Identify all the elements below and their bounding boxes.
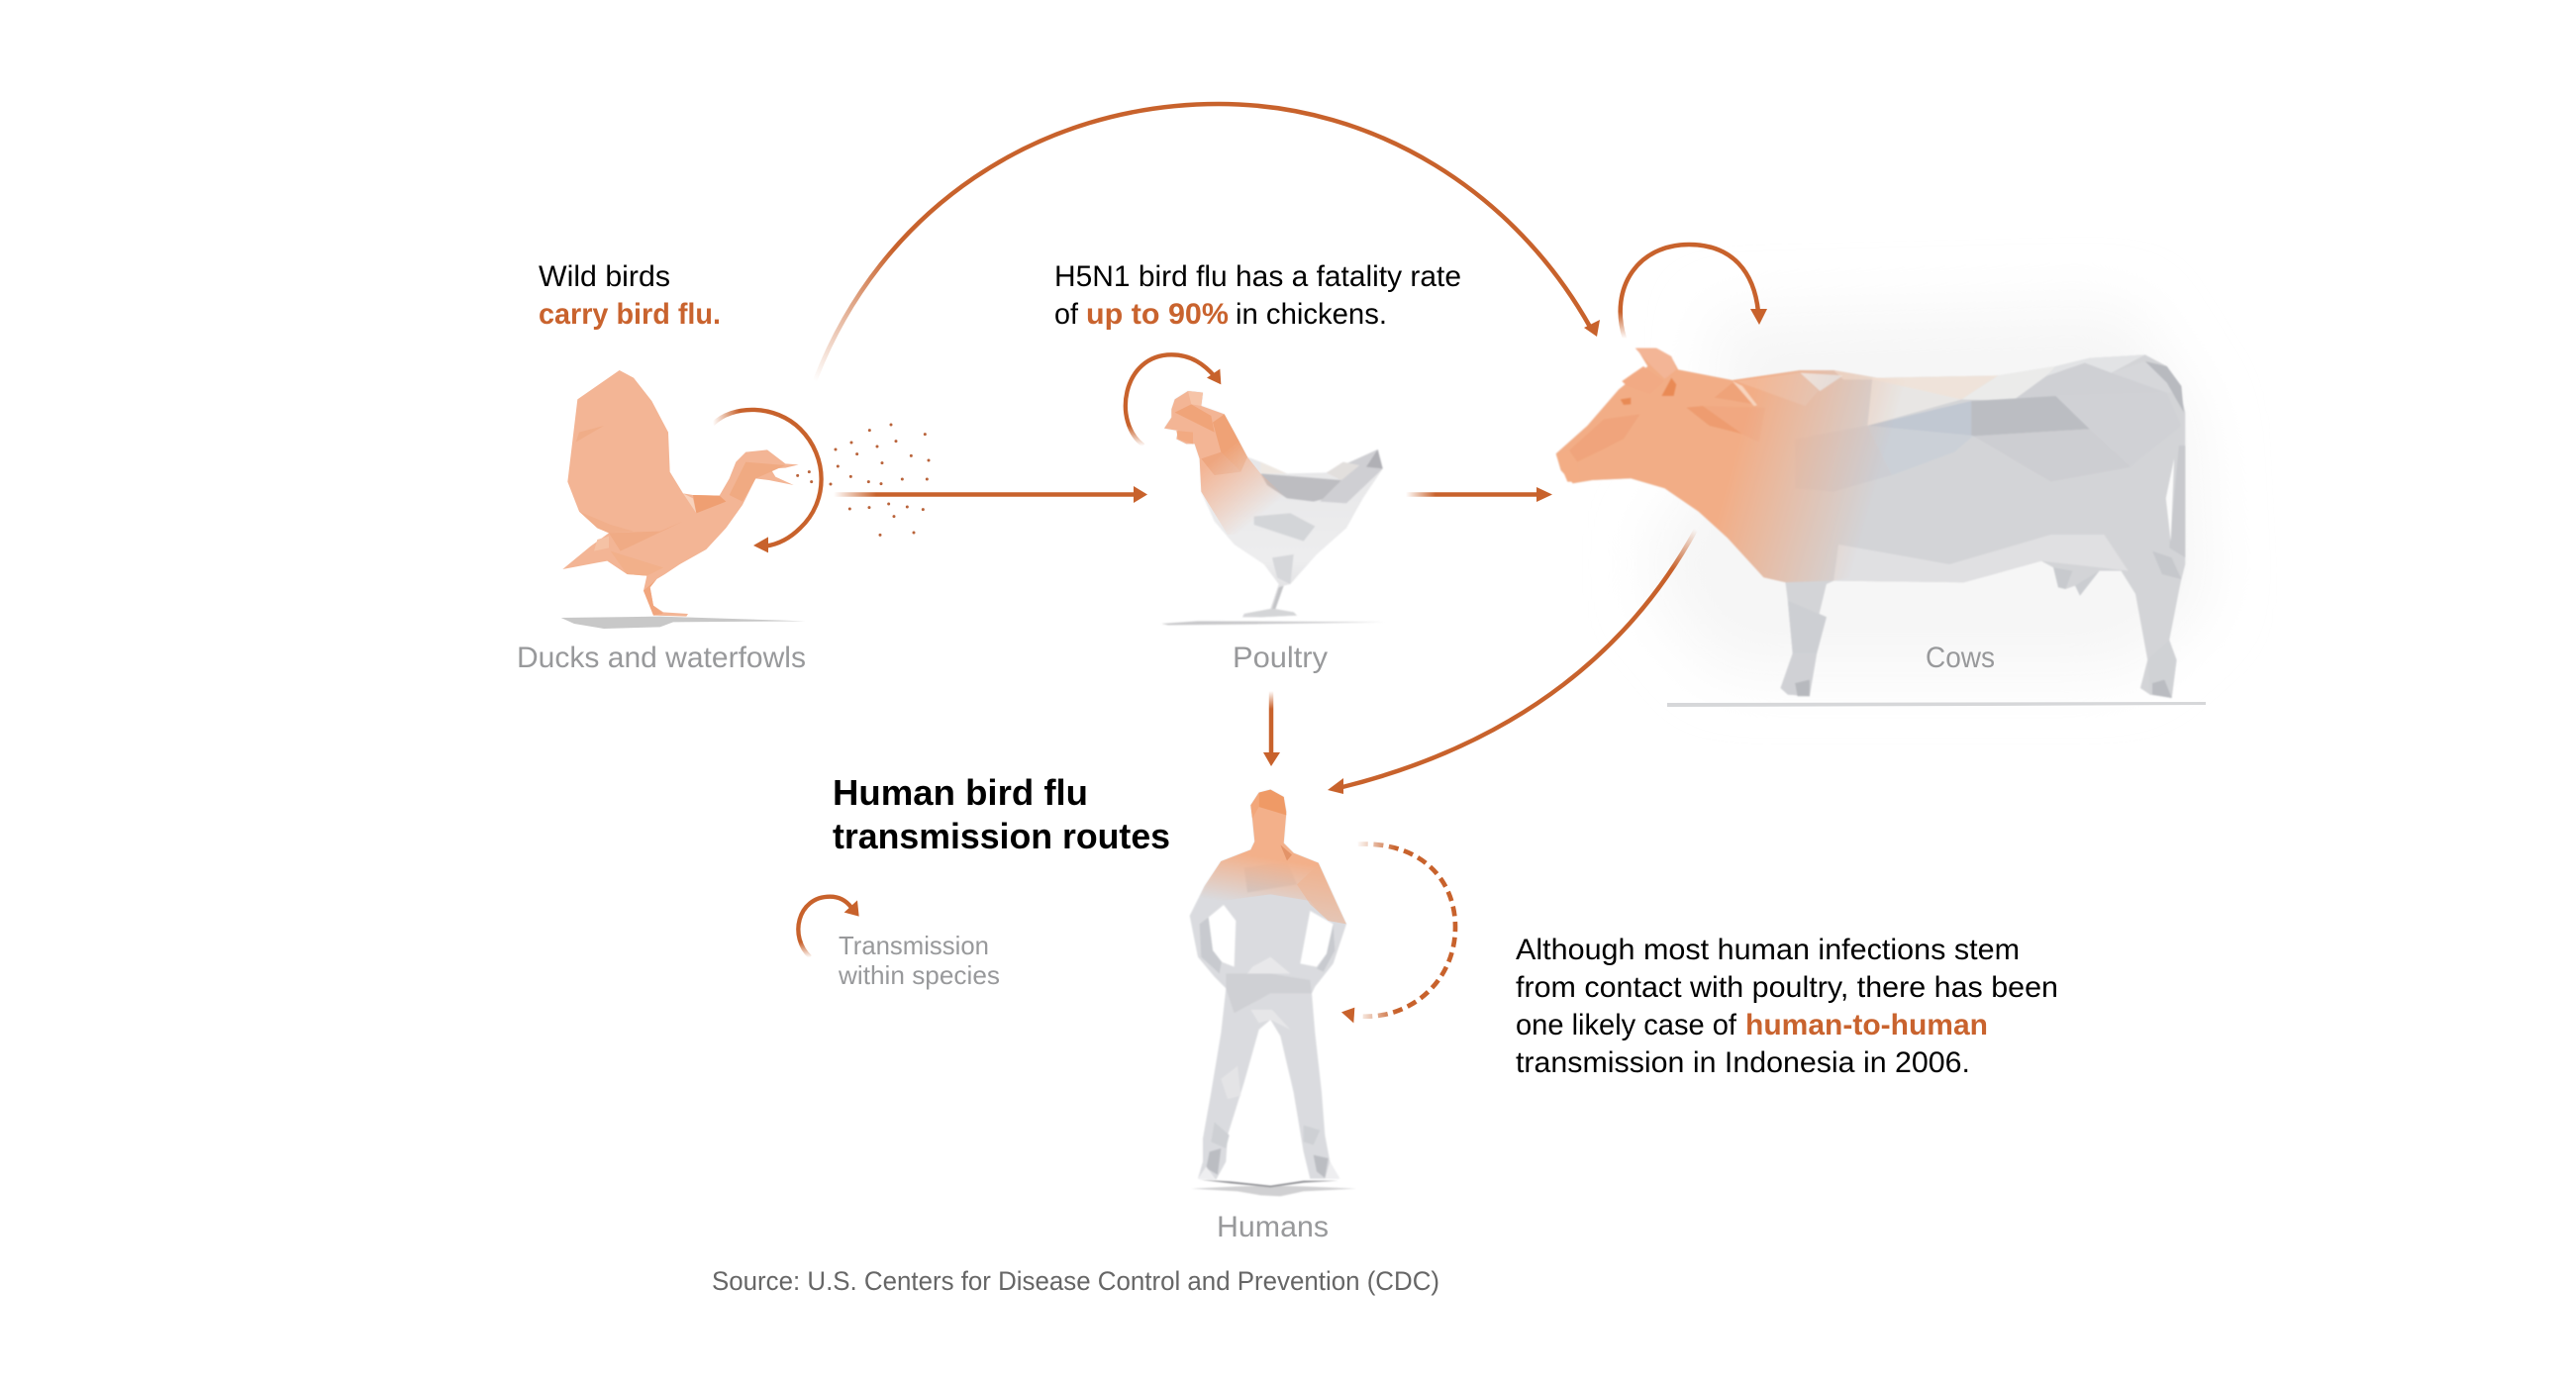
legend text: Transmission <box>839 931 989 960</box>
text: H5N1 fatality rate: up to 90% <box>1086 298 1229 331</box>
arrow: ducks to poultry <box>834 486 1147 503</box>
illustration: duck <box>561 370 805 629</box>
chicken shadow <box>1161 621 1384 625</box>
arrow: cows to humans <box>1328 530 1696 794</box>
human orange right-arm tint <box>1297 864 1346 924</box>
legend icon: loop arrow <box>798 897 859 957</box>
text: wild birds carry bird flu <box>539 260 721 331</box>
arrow: poultry to humans <box>1263 691 1280 766</box>
text: H5N1 fatality rate <box>1054 260 1461 331</box>
label: humans: Humans <box>1217 1211 1329 1243</box>
text: human infections note: Although most human infections stem <box>1516 934 2020 966</box>
arrow: poultry self-loop <box>1126 354 1221 446</box>
text: human infections note <box>1516 934 2058 1079</box>
cow top-back tint <box>1833 370 1998 399</box>
cow orange front <box>1555 346 1893 582</box>
human orange head and shoulders <box>1201 790 1341 913</box>
illustration: human <box>1190 790 1356 1196</box>
arrow: duck self-loop <box>713 410 822 552</box>
title: Human bird flu <box>833 772 1088 813</box>
text: H5N1 fatality rate: in chickens. <box>1236 298 1387 331</box>
arrow: cow self-loop <box>1621 245 1767 339</box>
title: transmission routes <box>833 816 1170 856</box>
legend text: within species <box>838 960 1000 990</box>
cow background mist <box>1653 307 2208 673</box>
text: wild birds carry bird flu: carry bird flu. <box>539 298 721 331</box>
chicken orange front <box>1164 391 1277 534</box>
human shadow <box>1191 1186 1356 1196</box>
title <box>833 772 1170 856</box>
label: cows: Cows <box>1926 642 1995 674</box>
text: H5N1 fatality rate: H5N1 bird flu has a fatality rate <box>1054 260 1461 293</box>
arrow: poultry to cows <box>1406 487 1552 502</box>
text: wild birds carry bird flu: Wild birds <box>539 260 670 293</box>
duck shadow <box>561 617 805 629</box>
droplets: virus particles <box>796 423 930 537</box>
legend text <box>838 931 1000 990</box>
label: poultry: Poultry <box>1233 642 1328 674</box>
text: H5N1 fatality rate: of <box>1054 298 1079 331</box>
text: human infections note: transmission in Indonesia in 2006. <box>1516 1046 1970 1079</box>
text: human infections note: human-to-human <box>1745 1009 1988 1041</box>
illustration: chicken <box>1161 391 1384 625</box>
text: human infections note: from contact with poultry, there has been <box>1516 971 2058 1004</box>
arrow: human-to-human dashed loop <box>1341 844 1455 1023</box>
illustration: cow <box>1556 307 2208 707</box>
arrow: wild birds to cows (big arc) <box>815 104 1600 381</box>
label: ducks and waterfowls: Ducks and waterfowls <box>517 642 806 674</box>
text: human infections note: one likely case of <box>1516 1009 1737 1041</box>
source: Source: U.S. Centers for Disease Control and Prevention (CDC) <box>712 1266 1439 1296</box>
cow ground shadow <box>1667 702 2206 707</box>
